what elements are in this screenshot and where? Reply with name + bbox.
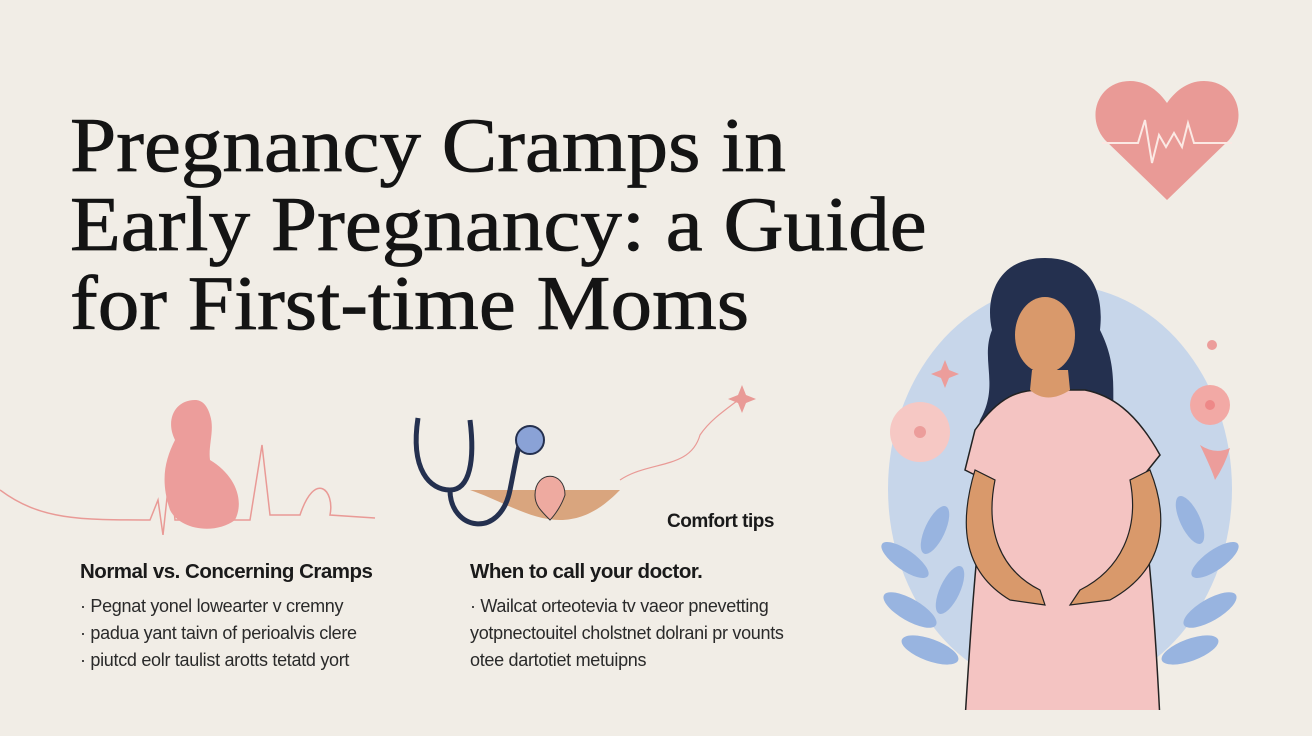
icon: heart with heartbeat — [1096, 81, 1238, 200]
label: comfort tips: Comfort tips — [667, 511, 774, 532]
hair — [979, 258, 1115, 442]
dress — [965, 390, 1160, 720]
title — [70, 102, 927, 346]
panel: when to call your doctor: yotpnectouitel cholstnet dolrani pr vounts — [470, 623, 784, 643]
arms — [966, 470, 1045, 605]
panel: normal vs concerning cramps: · Pegnat yonel lowearter v cremny — [80, 596, 343, 616]
panel: when to call your doctor — [470, 560, 784, 670]
icon: pregnant silhouette with heartbeat line — [0, 400, 375, 535]
title: Pregnancy Cramps in — [70, 102, 786, 188]
panel: when to call your doctor: When to call your doctor. — [470, 560, 702, 583]
face — [1015, 297, 1075, 373]
panel: when to call your doctor: otee dartotiet metuipns — [470, 650, 646, 670]
panel: normal vs concerning cramps — [80, 560, 372, 670]
flowers — [890, 340, 1230, 480]
icon: stethoscope on belly — [414, 385, 756, 526]
leaves — [876, 492, 1244, 671]
panel: when to call your doctor: · Wailcat orteotevia tv vaeor pnevetting — [470, 596, 768, 616]
panel: normal vs concerning cramps: · piutcd eolr taulist arotts tetatd yort — [80, 650, 349, 670]
panel: normal vs concerning cramps: · padua yant taivn of perioalvis clere — [80, 623, 357, 643]
title: for First-time Moms — [70, 260, 749, 346]
panel: normal vs concerning cramps: Normal vs. Concerning Cramps — [80, 560, 372, 583]
illustration: pregnant woman — [881, 258, 1239, 710]
title: Early Pregnancy: a Guide — [70, 181, 927, 267]
